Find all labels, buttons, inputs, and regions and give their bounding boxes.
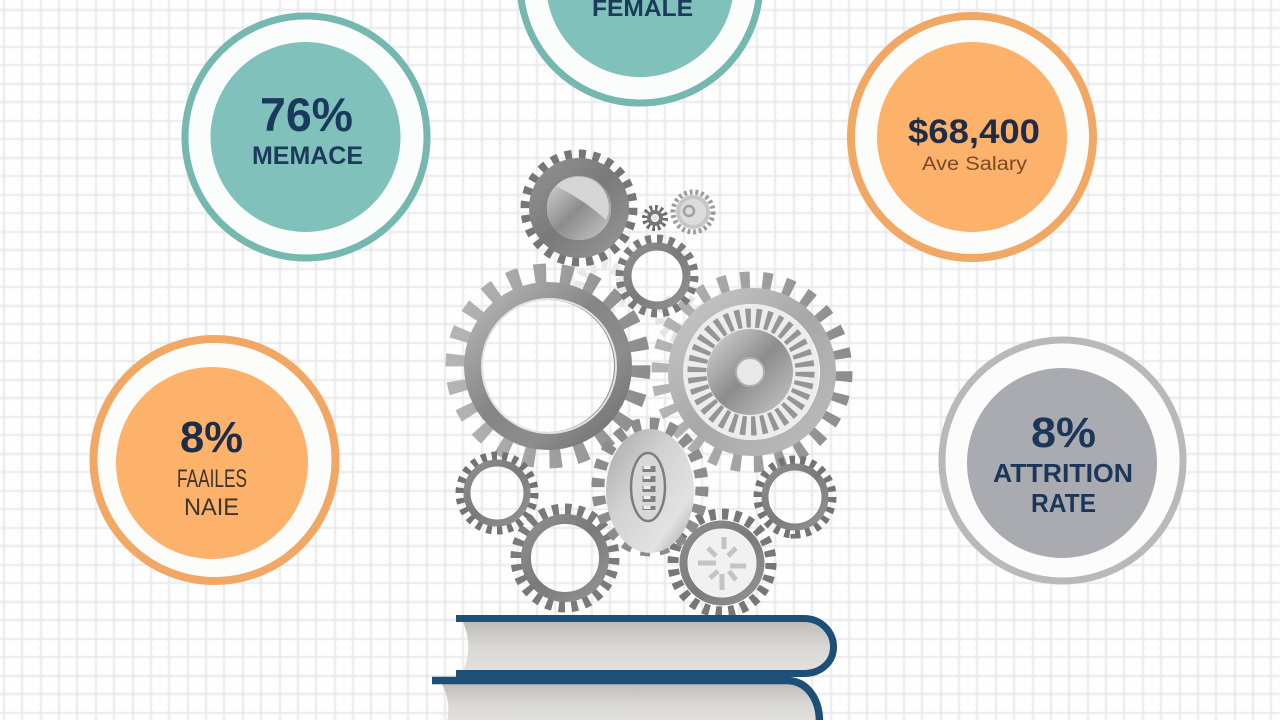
gear: bottom left [516, 509, 614, 607]
label: MEMACE: MEMACE [252, 142, 363, 170]
faint helper gear upper right [660, 298, 700, 338]
value: 76%: 76% [260, 88, 353, 141]
stat circle: female teal, cropped at top [520, 0, 760, 103]
gear: big right [662, 282, 842, 462]
stat circle: salary orange [851, 16, 1093, 258]
gear: big left [456, 274, 640, 458]
stat circle: 8% orange [94, 339, 336, 581]
label line one: FAAILES [177, 465, 247, 493]
gear: small light [673, 192, 713, 232]
faint helper gear upper left [580, 265, 624, 309]
label: average salary: Ave Salary [922, 154, 1028, 175]
label line two: NAIE [184, 494, 239, 521]
label: ATTRITION: ATTRITION [993, 458, 1133, 488]
book: upper [456, 618, 834, 674]
value: $68,400: $68,400 [908, 113, 1040, 151]
stat circle: 76% teal [185, 16, 427, 258]
value: 8%: 8% [180, 413, 243, 462]
gear: lower left [460, 456, 534, 530]
gears cluster [456, 156, 842, 612]
gear: centre oval [598, 424, 702, 553]
value: 8%: 8% [1031, 409, 1096, 457]
label: RATE: RATE [1031, 488, 1096, 518]
book: lower [432, 680, 820, 720]
gear: tiny dark [645, 208, 665, 228]
books stack [432, 618, 834, 720]
stat circle: attrition gray [942, 340, 1183, 581]
gear: bottom right with patterned centre [673, 514, 771, 612]
gear: lower right [758, 460, 832, 534]
gear: top with silver disc [527, 156, 631, 260]
gear: middle small [620, 239, 694, 313]
